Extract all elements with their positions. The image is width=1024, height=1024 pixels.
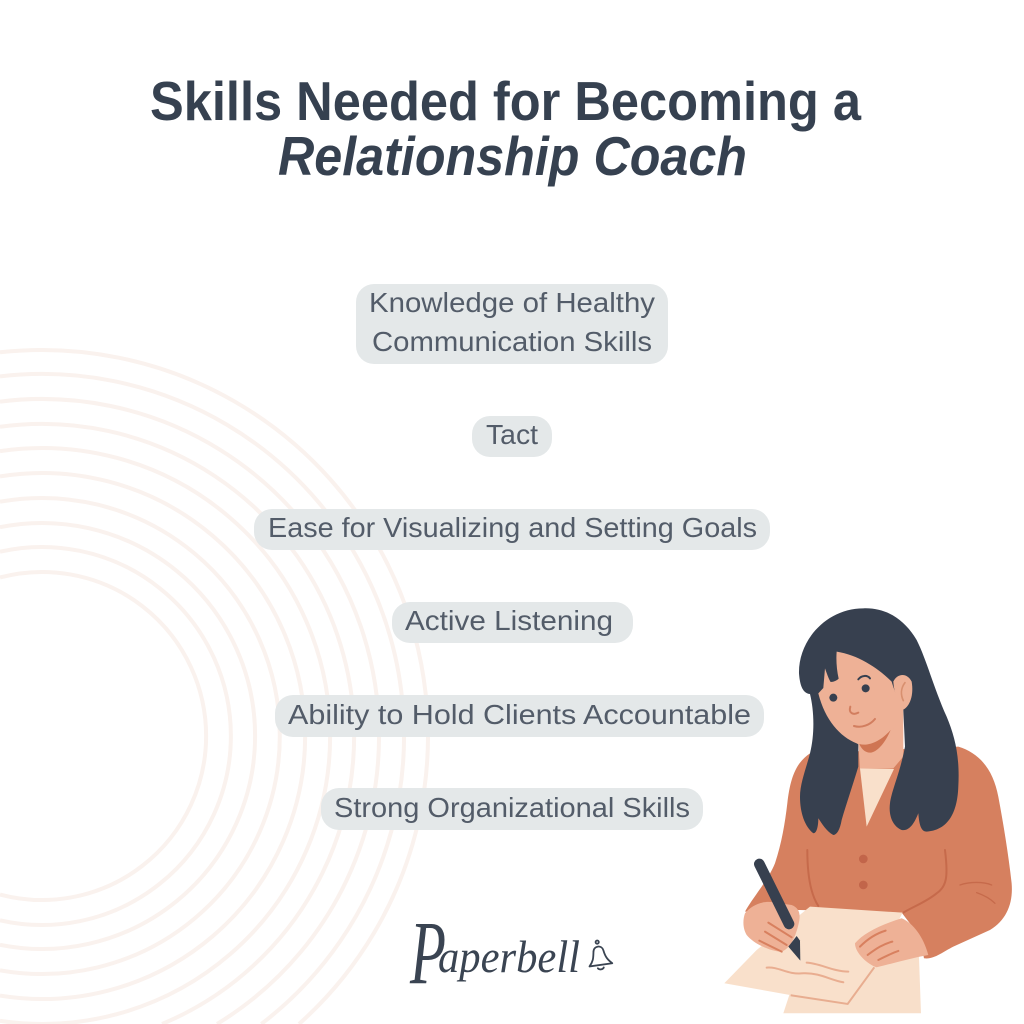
hands, paper and pen	[724, 864, 928, 1004]
pen	[759, 864, 800, 961]
hair	[799, 608, 959, 835]
background concentric rings	[0, 350, 428, 1024]
skill: Active Listening	[392, 602, 633, 643]
skill: Ease for Visualizing and Setting Goals	[254, 509, 770, 550]
skill: Knowledge of Healthy Communication Skills: Knowledge of Healthy	[369, 287, 655, 318]
skill: Knowledge of Healthy Communication Skills: Communication Skills	[372, 326, 652, 357]
ear	[893, 675, 912, 710]
icon: bell	[586, 939, 613, 971]
logo: Paperbell: aperbell	[438, 931, 580, 982]
lower paper sheet	[783, 957, 921, 1013]
skill: Active Listening: Active Listening	[405, 605, 613, 636]
illustration: woman writing	[724, 608, 1012, 1013]
orange cardigan	[745, 747, 1012, 959]
logo: Paperbell: P	[409, 904, 446, 1003]
face	[818, 652, 903, 746]
upper paper sheet	[724, 907, 903, 1004]
logo: Paperbell	[409, 904, 613, 1003]
nose and smile	[850, 707, 875, 727]
cardigan fold lines	[807, 850, 995, 913]
neck	[858, 710, 903, 768]
skill: Ease for Visualizing and Setting Goals: Ease for Visualizing and Setting Goals	[268, 512, 757, 543]
cardigan buttons	[859, 855, 868, 889]
skill: Ability to Hold Clients Accountable: Ability to Hold Clients Accountable	[288, 699, 751, 730]
head and hair	[799, 608, 959, 835]
skill: Tact: Tact	[486, 419, 538, 450]
left fingers	[759, 923, 792, 952]
title: Skills Needed for Becoming a	[150, 70, 861, 132]
title	[150, 70, 861, 187]
title: Relationship Coach	[278, 125, 747, 187]
chin shadow	[859, 730, 891, 753]
cream shirt	[860, 768, 894, 827]
eyes and eyebrow	[829, 676, 870, 702]
right hand	[855, 918, 928, 967]
left hand	[743, 902, 800, 952]
skill: Tact	[472, 416, 552, 457]
writing lines	[767, 963, 848, 982]
skill: Strong Organizational Skills: Strong Organizational Skills	[334, 792, 690, 823]
skill: Knowledge of Healthy Communication Skills	[356, 284, 668, 364]
skill: Strong Organizational Skills	[321, 788, 703, 830]
skill: Ability to Hold Clients Accountable	[275, 695, 764, 737]
